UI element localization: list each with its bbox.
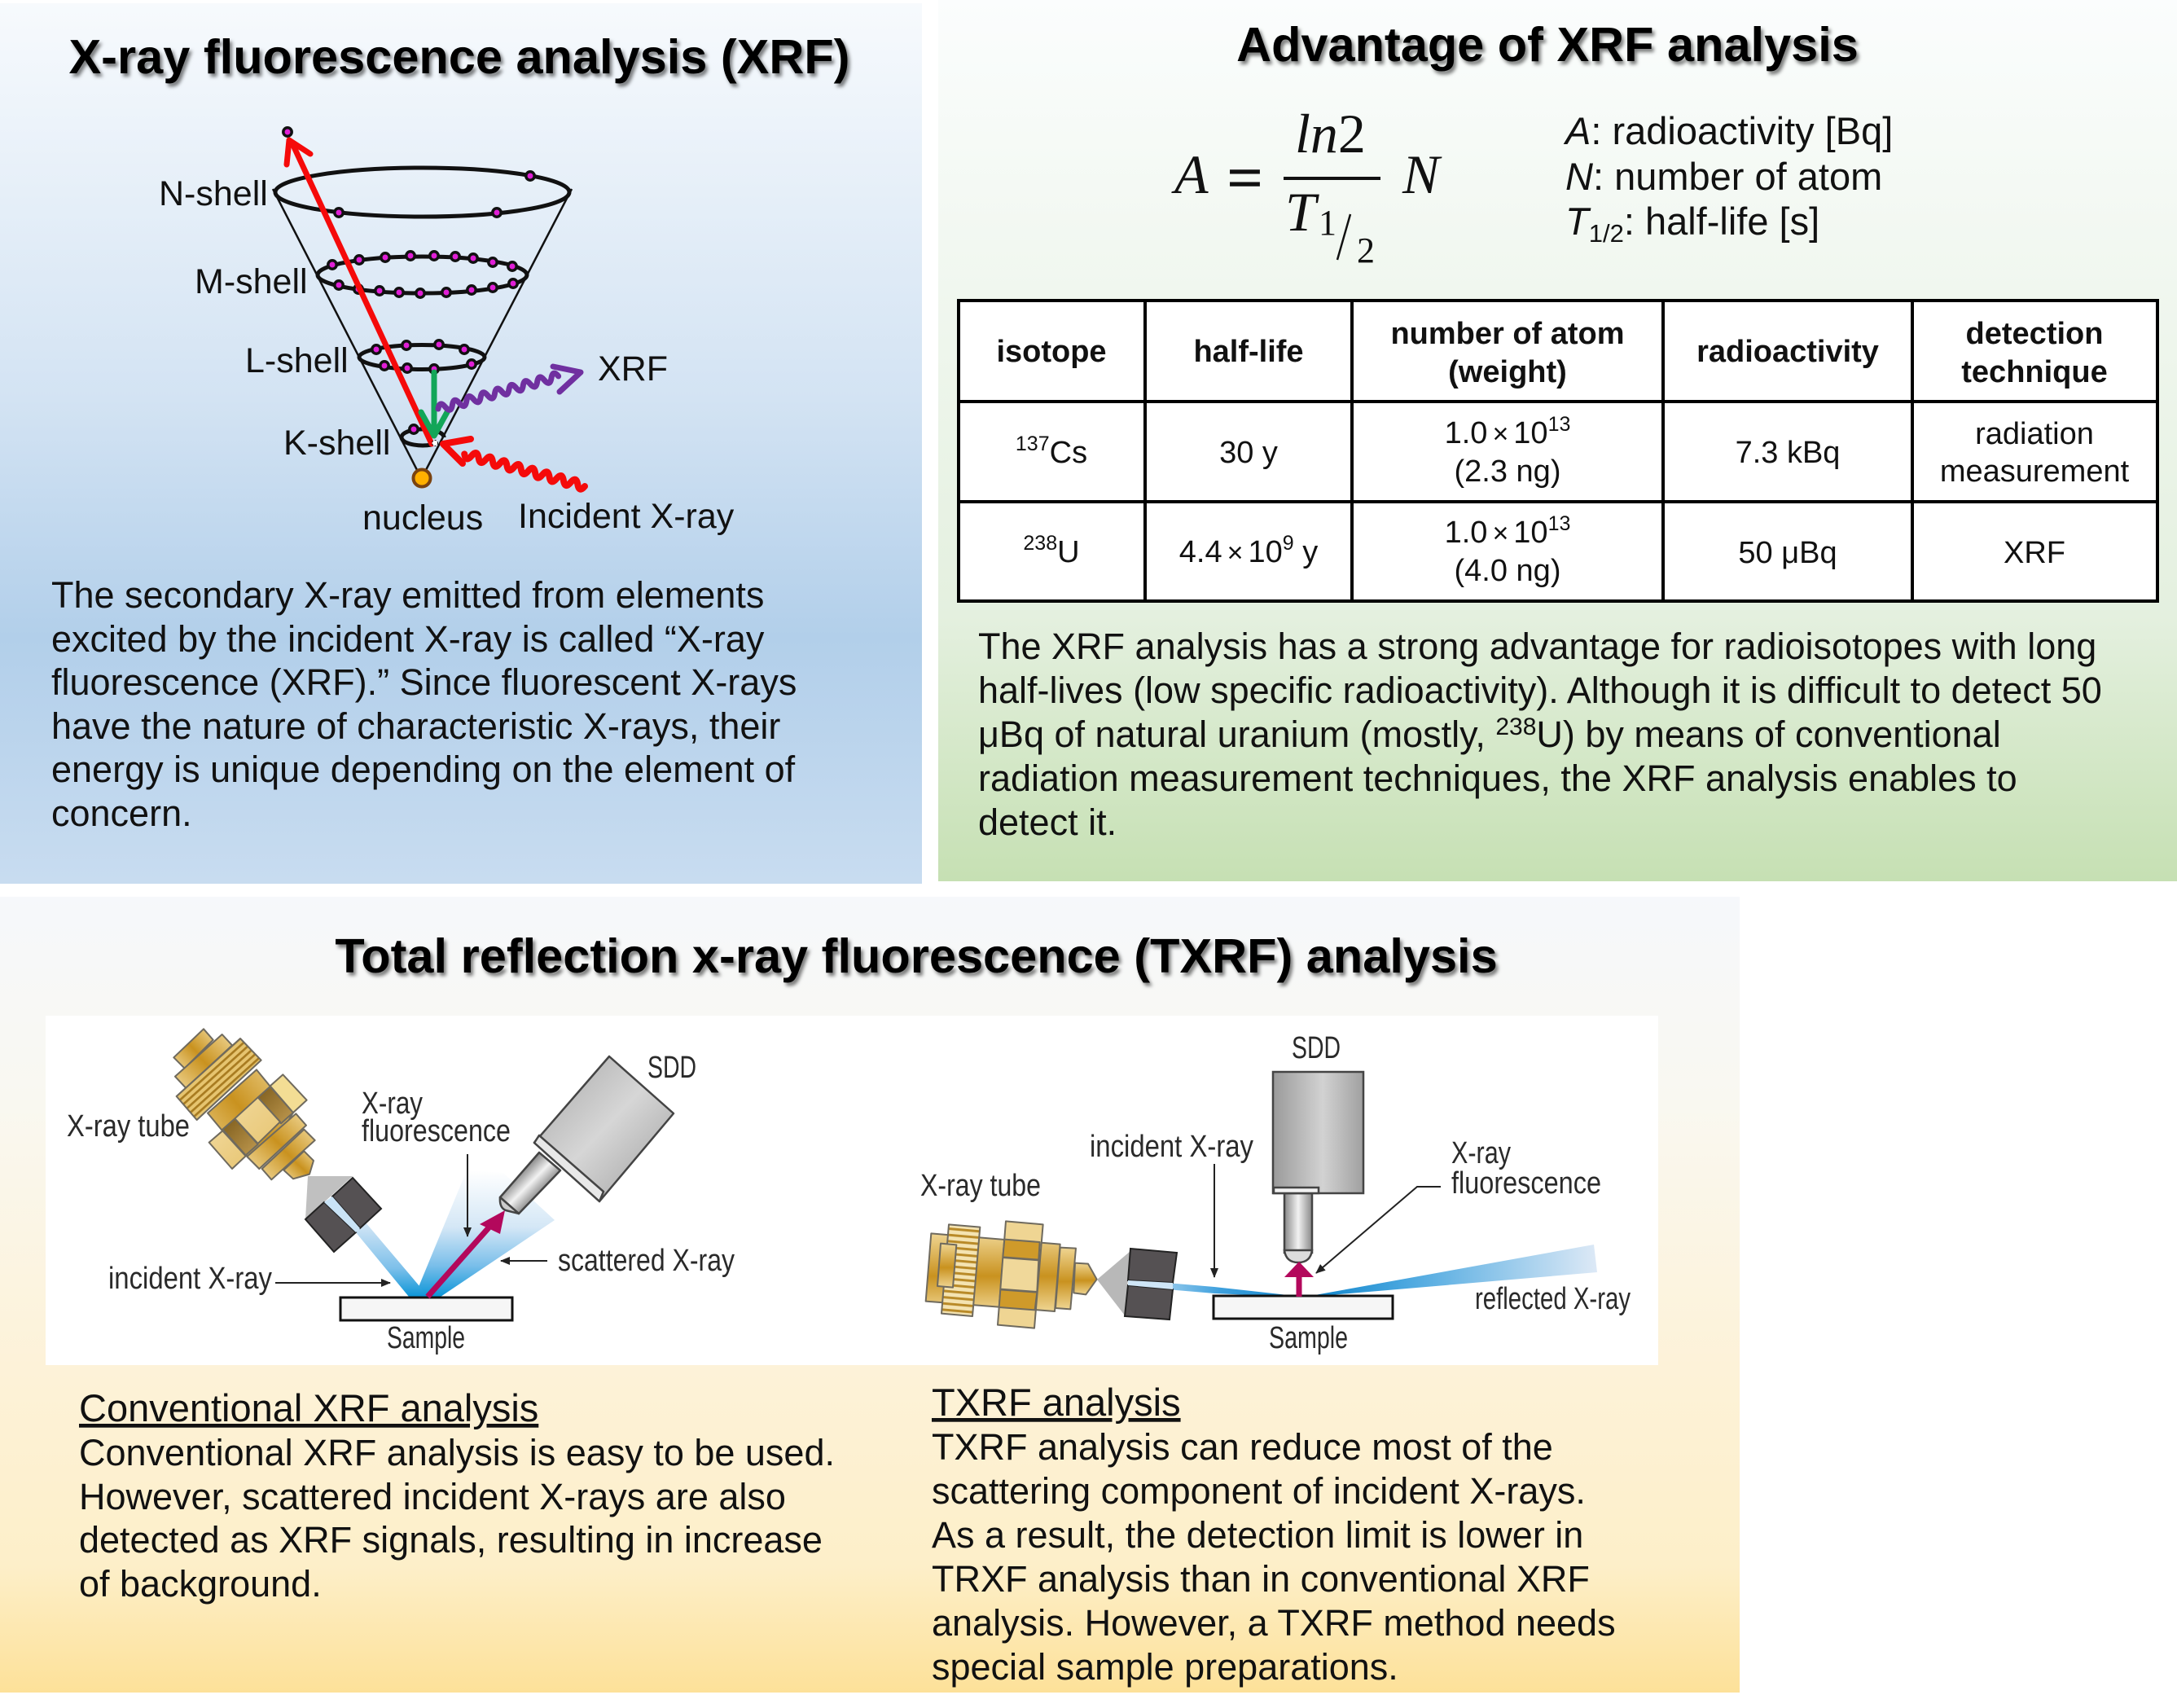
table row: Cs-137: 1.0×10: [1445, 416, 1548, 450]
arrow: XRF wave: [437, 367, 581, 413]
diagram background: [46, 1016, 1658, 1365]
labels: [67, 1051, 735, 1355]
table row: U-238: U: [1057, 535, 1080, 569]
text: conventional XRF: Conventional XRF analysis: [79, 1386, 538, 1429]
arrow: ejected electron: [287, 140, 432, 444]
title: advantage: Advantage of XRF analysis: [1236, 17, 1859, 72]
table row: U-238: 4.4×10: [1179, 535, 1283, 569]
labels: SDD: [647, 1051, 696, 1085]
shell orbits: [275, 168, 569, 446]
table row: Cs-137: 13: [1548, 413, 1570, 436]
table row: U-238: 1.0×10: [1445, 516, 1548, 550]
formula legend: : half-life [s]: [1624, 200, 1819, 243]
text: XRF description: energy is unique depending on the element of: [51, 749, 796, 790]
table row: U-238: 238: [1023, 532, 1057, 555]
table header: detection: [1966, 317, 2103, 351]
shell labels: nucleus: [362, 498, 483, 538]
text: advantage description: detect it.: [978, 801, 1117, 843]
formula: 2: [1357, 231, 1375, 270]
table header: technique: [1961, 355, 2108, 389]
formula: N: [1402, 143, 1442, 205]
table row: Cs-137: Cs: [1050, 436, 1087, 470]
shell labels: XRF: [598, 349, 668, 389]
table header: half-life: [1193, 335, 1304, 369]
formula legend: 1/2: [1589, 219, 1624, 248]
table header: isotope: [996, 335, 1107, 369]
panel: Advantage of XRF analysis: [938, 0, 2177, 881]
labels: [920, 1031, 1631, 1355]
labels: reflected X-ray: [1475, 1282, 1631, 1316]
incident beam: [355, 1223, 428, 1297]
shell labels: N-shell: [159, 174, 268, 213]
table row: U-238: y: [1294, 535, 1318, 569]
title: TXRF: Total reflection x-ray fluorescence (TXRF) analysis: [335, 929, 1498, 983]
SDD detector: [500, 1056, 674, 1214]
scattered fan: [415, 1170, 555, 1297]
formula: [1171, 103, 1442, 270]
text: XRF description: fluorescence (XRF).” Since fluorescent X-rays: [51, 661, 797, 703]
text: TXRF: special sample preparations.: [932, 1646, 1398, 1688]
text: advantage description: radiation measurement techniques, the XRF analysis enables to: [978, 757, 2017, 799]
labels: X-ray: [1451, 1136, 1511, 1170]
X-ray tube: [926, 1221, 1097, 1328]
labels: Sample: [387, 1321, 465, 1355]
text: TXRF: scattering component of incident X-rays.: [932, 1470, 1586, 1512]
shell labels: [159, 174, 735, 538]
text: conventional XRF: Conventional XRF analysis is easy to be used.: [79, 1432, 835, 1473]
table header: number of atom: [1390, 317, 1625, 351]
table row: Cs-137: [1016, 413, 2130, 489]
arrow: fluorescence: [1297, 1275, 1301, 1297]
table: isotope comparison: [959, 301, 2157, 601]
text: TXRF: TRXF analysis than in conventional XRF: [932, 1558, 1590, 1600]
text: advantage description: μBq of natural uranium (mostly,: [978, 713, 1486, 755]
formula legend: N: number of atom: [1565, 155, 1882, 198]
table row: U-238: (4.0 ng): [1455, 554, 1560, 588]
X-ray tube: [173, 1029, 315, 1179]
panel: TXRF analysis: [0, 897, 1740, 1693]
formula: =: [1227, 144, 1262, 213]
table row: U-238: 50 μBq: [1738, 536, 1837, 570]
text: XRF description: concern.: [51, 793, 192, 834]
formula: T: [1285, 181, 1319, 243]
formula legend: T: [1565, 200, 1591, 243]
pointer arrows: [1214, 1164, 1441, 1277]
shell labels: M-shell: [195, 262, 308, 301]
table row: U-238: 13: [1548, 512, 1570, 535]
formula: ln2: [1295, 103, 1366, 165]
title: XRF: X-ray fluorescence analysis (XRF): [68, 29, 850, 84]
labels: X-ray: [362, 1087, 423, 1121]
table row: Cs-137: 7.3 kBq: [1736, 436, 1840, 470]
table row: U-238: [1023, 512, 2065, 588]
shell labels: K-shell: [283, 424, 390, 463]
text: advantage description: half-lives (low specific radioactivity). Although it is difficult to detect 50: [978, 670, 2102, 711]
labels: scattered X-ray: [558, 1244, 735, 1278]
table row: Cs-137: measurement: [1940, 454, 2130, 489]
table header: (weight): [1448, 355, 1567, 389]
text: advantage description: U) by means of conventional: [1536, 713, 2001, 755]
collimator: [305, 1176, 381, 1252]
cone outline: [273, 189, 572, 470]
labels: SDD: [1292, 1031, 1341, 1065]
text: conventional XRF: detected as XRF signals, resulting in increase: [79, 1519, 823, 1561]
text: advantage description: The XRF analysis has a strong advantage for radioisotopes with long: [978, 626, 2096, 667]
formula legend: [1563, 109, 1893, 248]
text: conventional XRF: [79, 1386, 835, 1605]
sample: [340, 1297, 512, 1320]
collimator: [1097, 1249, 1177, 1319]
text: TXRF: TXRF analysis can reduce most of the: [932, 1426, 1553, 1468]
table row: Cs-137: 30 y: [1219, 436, 1278, 470]
labels: X-ray tube: [920, 1169, 1041, 1203]
diagram: conventional XRF: [67, 1029, 735, 1355]
arrow: electron transition: [421, 372, 447, 436]
text: XRF description: The secondary X-ray emitted from elements: [51, 574, 764, 616]
table row: Cs-137: (2.3 ng): [1455, 454, 1560, 489]
text: conventional XRF: However, scattered incident X-rays are also: [79, 1476, 786, 1517]
electrons: [283, 128, 534, 433]
text: TXRF: [932, 1381, 1616, 1688]
arrow: fluorescence: [428, 1225, 491, 1297]
table header: [996, 317, 2108, 389]
text: XRF description: have the nature of characteristic X-rays, their: [51, 705, 780, 747]
text: TXRF: TXRF analysis: [932, 1381, 1181, 1424]
table row: U-238: XRF: [2004, 536, 2065, 570]
text: XRF description: [51, 574, 797, 834]
pointer arrows: [275, 1154, 547, 1283]
text: TXRF: analysis. However, a TXRF method needs: [932, 1602, 1616, 1644]
table row: U-238: 9: [1283, 532, 1294, 555]
text: XRF description: excited by the incident X-ray is called “X-ray: [51, 618, 765, 660]
text: conventional XRF: of background.: [79, 1563, 322, 1605]
table row: Cs-137: radiation: [1975, 417, 2094, 451]
labels: fluorescence: [1451, 1166, 1601, 1201]
arrow: incident X-ray wave: [443, 439, 586, 490]
formula: A: [1171, 143, 1209, 205]
labels: X-ray tube: [67, 1109, 190, 1144]
vacancy marker: [432, 440, 438, 446]
labels: incident X-ray: [108, 1262, 272, 1296]
labels: Sample: [1269, 1321, 1348, 1355]
labels: incident X-ray: [1090, 1130, 1253, 1164]
formula: 1: [1319, 203, 1336, 243]
text: advantage description: [978, 626, 2102, 843]
SDD detector: [1273, 1072, 1363, 1262]
table header: radioactivity: [1696, 335, 1879, 369]
panel: X-ray fluorescence analysis: [0, 3, 922, 884]
labels: fluorescence: [362, 1114, 511, 1148]
nucleus: [414, 469, 430, 487]
text: advantage description: 238: [1495, 713, 1536, 740]
text: TXRF: As a result, the detection limit is lower in: [932, 1514, 1583, 1556]
shell labels: Incident X-ray: [518, 497, 735, 536]
atom shell diagram: [159, 128, 735, 538]
table row: Cs-137: 137: [1016, 432, 1050, 455]
formula legend: A: radioactivity [Bq]: [1563, 109, 1893, 152]
beams: [1129, 1245, 1597, 1297]
shell labels: L-shell: [245, 341, 349, 380]
diagram: TXRF: [920, 1031, 1631, 1355]
sample: [1214, 1296, 1393, 1319]
